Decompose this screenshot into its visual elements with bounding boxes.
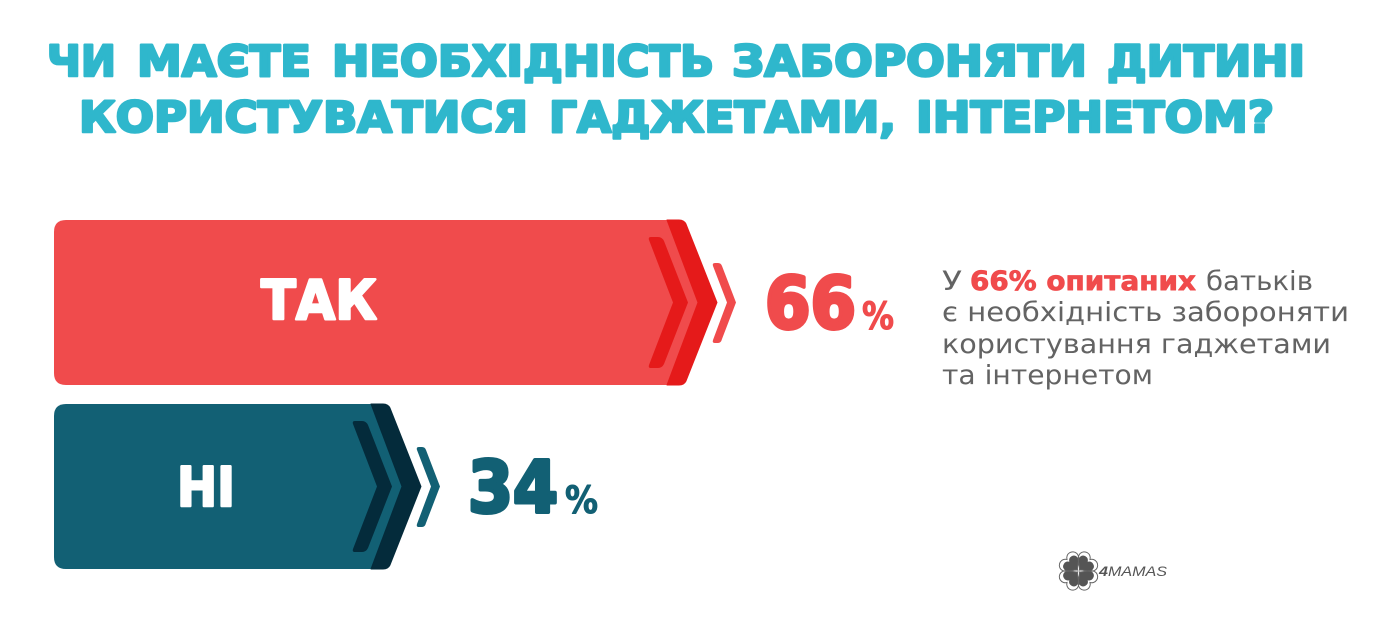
value 34%: % [565, 479, 598, 522]
red bar body [54, 220, 698, 385]
label ТАК: ТАК [261, 269, 377, 332]
logo: 4MAMAS [1057, 549, 1168, 593]
description text: та інтернетом [942, 360, 1153, 391]
small outer teal chevron [417, 447, 440, 527]
title: ДИТИНІ [1107, 37, 1305, 87]
teal bar body [54, 404, 402, 569]
title: ЧИ [47, 37, 116, 87]
title: ЗАБОРОНЯТИ [732, 37, 1087, 87]
title: МАЄТЕ [137, 37, 311, 87]
value 66%: 66 [765, 262, 856, 345]
description text [942, 266, 1349, 391]
bar: НІ 34% [54, 404, 598, 569]
description text: 66% опитаних [970, 266, 1196, 297]
wordmark: 4MAMAS [1098, 563, 1168, 579]
small outer chevron [713, 263, 736, 343]
title: ІНТЕРНЕТОМ? [916, 93, 1274, 143]
title [47, 37, 1305, 143]
description text: У [942, 266, 962, 297]
label НІ: НІ [177, 456, 235, 519]
inner dark teal chevron [353, 421, 392, 552]
value 34%: 34 [468, 446, 558, 529]
large dark teal chevron [371, 404, 421, 569]
description text: користування гаджетами [942, 329, 1331, 360]
value 66%: % [862, 295, 894, 338]
inner dark red chevron [649, 237, 688, 368]
title: НЕОБХІДНІСТЬ [332, 37, 714, 87]
bar: ТАК 66% [54, 220, 894, 385]
icon: clover [1057, 549, 1100, 593]
title: КОРИСТУВАТИСЯ [79, 93, 528, 143]
description text: батьків [1206, 266, 1313, 297]
large dark red chevron [667, 220, 717, 385]
description text: є необхідність забороняти [942, 297, 1349, 328]
title: ГАДЖЕТАМИ, [549, 93, 896, 143]
